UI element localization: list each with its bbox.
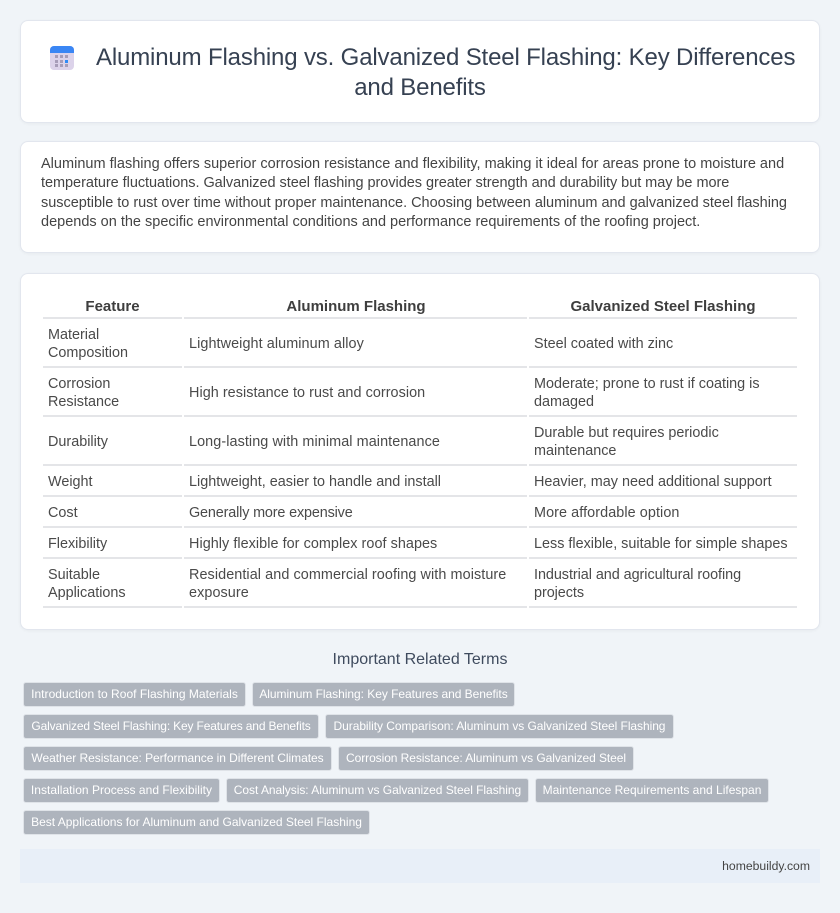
row: Material Composition: Composition	[48, 345, 128, 361]
tag: Maintenance Requirements and Lifespan	[543, 783, 761, 797]
heading: Important Related Terms: Important Related Terms	[333, 651, 507, 668]
title: Aluminum Flashing vs. Galvanized Steel Flashing: Key Differences	[96, 44, 795, 71]
tag: Weather Resistance: Performance in Different Climates	[31, 751, 324, 765]
row: Flexibility: Flexibility	[48, 536, 107, 552]
comparison table: Durable but requires periodic	[534, 425, 719, 441]
tag	[252, 682, 515, 707]
panel: comparison table card	[20, 273, 820, 630]
text block: introduction: depends on the specific environmental conditions and performance requirements of the roofing project.	[41, 214, 700, 230]
row: Corrosion Resistance: Corrosion	[48, 376, 110, 392]
row: Material Composition: Material	[48, 327, 99, 343]
row: Material Composition	[48, 327, 128, 361]
tag	[338, 746, 634, 771]
footer bar	[20, 849, 820, 883]
tag	[23, 714, 319, 739]
comparison table: Less flexible, suitable for simple shapes	[534, 536, 788, 552]
text block: introduction: Aluminum flashing offers superior corrosion resistance and flexibility, making it ideal for areas prone to moisture and	[41, 156, 784, 172]
text block: introduction: temperature fluctuations. Galvanized steel flashing provides greater strength and durability but may be more	[41, 175, 729, 191]
row: Durability: Durability	[48, 434, 108, 450]
tag	[535, 778, 769, 803]
comparison table: maintenance	[534, 443, 616, 459]
tag: Best Applications for Aluminum and Galvanized Steel Flashing	[31, 815, 362, 829]
tag: Durability Comparison: Aluminum vs Galvanized Steel Flashing	[334, 719, 665, 733]
tag	[23, 682, 246, 707]
comparison table: Long-lasting with minimal maintenance	[189, 434, 440, 450]
panel: intro card	[20, 141, 820, 253]
comparison table	[43, 298, 797, 608]
row: Cost: Cost	[48, 505, 78, 521]
header: Feature: Feature	[85, 298, 140, 315]
comparison table: Lightweight aluminum alloy	[189, 336, 364, 352]
header: Galvanized Steel Flashing: Galvanized Steel Flashing	[570, 298, 756, 315]
icon: calendar	[50, 46, 74, 70]
tag: Installation Process and Flexibility	[31, 783, 212, 797]
text block: introduction: susceptible to rust over time without proper maintenance. Choosing between aluminum and galvanized steel flashing	[41, 195, 787, 211]
comparison table: projects	[534, 585, 584, 601]
comparison table: Industrial and agricultural roofing	[534, 567, 741, 583]
tag: Aluminum Flashing: Key Features and Benefits	[259, 687, 508, 701]
tag	[23, 746, 332, 771]
comparison table: Generally more expensive	[189, 505, 353, 521]
row: Corrosion Resistance	[48, 376, 119, 410]
row: Suitable Applications: Applications	[48, 585, 126, 601]
comparison table: More affordable option	[534, 505, 680, 521]
title: and Benefits	[354, 74, 486, 101]
tag	[325, 714, 674, 739]
tag: Corrosion Resistance: Aluminum vs Galvanized Steel	[346, 751, 626, 765]
tag: Galvanized Steel Flashing: Key Features and Benefits	[31, 719, 311, 733]
row: Weight: Weight	[48, 474, 93, 490]
row: Suitable Applications: Suitable	[48, 567, 100, 583]
comparison table: Moderate; prone to rust if coating is	[534, 376, 760, 392]
tag	[23, 810, 370, 835]
header: Aluminum Flashing: Aluminum Flashing	[286, 298, 426, 315]
tag list	[23, 682, 769, 835]
comparison table: damaged	[534, 394, 594, 410]
tag: Cost Analysis: Aluminum vs Galvanized Steel Flashing	[234, 783, 521, 797]
panel: title card	[20, 20, 820, 123]
comparison table: exposure	[189, 585, 249, 601]
row: Corrosion Resistance: Resistance	[48, 394, 119, 410]
comparison table: Lightweight, easier to handle and install	[189, 474, 441, 490]
comparison table: Steel coated with zinc	[534, 336, 673, 352]
comparison table: Residential and commercial roofing with moisture	[189, 567, 506, 583]
comparison table: Highly flexible for complex roof shapes	[189, 536, 437, 552]
tag	[23, 778, 220, 803]
comparison table: Heavier, may need additional support	[534, 474, 772, 490]
tag: Introduction to Roof Flashing Materials	[31, 687, 238, 701]
title	[96, 44, 795, 101]
text block: introduction	[41, 156, 787, 230]
footer text: homebuildy.com	[722, 859, 810, 873]
row: Suitable Applications	[48, 567, 126, 601]
tag	[226, 778, 529, 803]
comparison table: High resistance to rust and corrosion	[189, 385, 425, 401]
